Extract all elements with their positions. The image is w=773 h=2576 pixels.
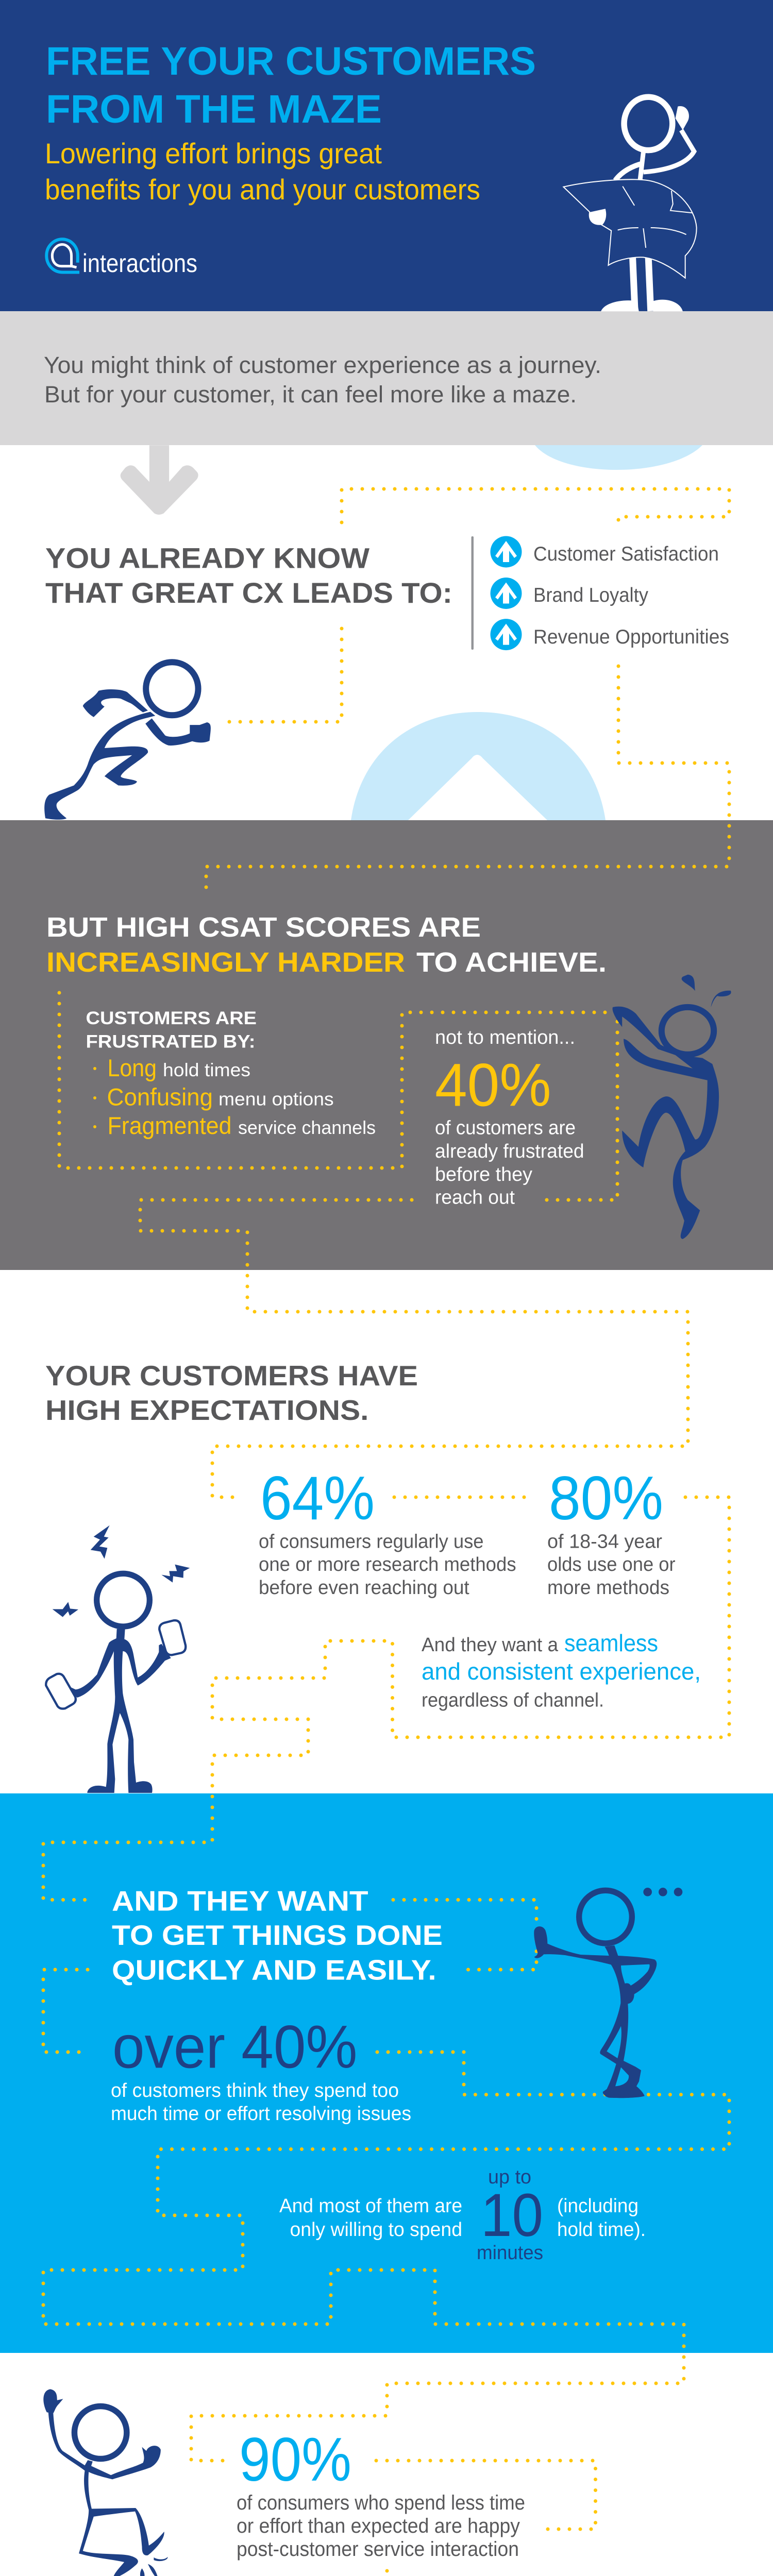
heading: get things done: AND THEY WANT [112, 1885, 368, 1917]
heading: get things done: TO GET THINGS DONE [112, 1919, 443, 1951]
stat: 64 percent: one or more research methods [259, 1554, 516, 1575]
title [46, 39, 536, 131]
heading: you already know: YOU ALREADY KNOW [45, 542, 369, 574]
text: seamless experience [422, 1630, 701, 1711]
text: willing to spend 10 minutes: minutes [477, 2242, 543, 2264]
text: seamless experience: and consistent experience, [422, 1658, 701, 1685]
frustration list: Long [107, 1054, 157, 1081]
text: seamless experience: And they want a [422, 1634, 559, 1656]
heading: high csat [46, 912, 607, 978]
text: willing to spend 10 minutes: up to [488, 2166, 531, 2188]
heading: high expectations: YOUR CUSTOMERS HAVE [45, 1360, 418, 1392]
heading: high csat: BUT HIGH CSAT SCORES ARE [46, 912, 481, 943]
arrow: grey down arrow [121, 445, 198, 515]
heading: high csat: TO ACHIEVE. [416, 947, 607, 978]
benefit labels: Brand Loyalty [533, 584, 648, 606]
benefits list [471, 536, 729, 650]
decoration: light blue circle [535, 445, 702, 470]
stat: 64 percent: before even reaching out [259, 1577, 469, 1599]
frustration list: Confusing [107, 1083, 213, 1111]
stat: 90 percent: 90% [239, 2425, 351, 2494]
title: FROM THE MAZE [46, 87, 382, 131]
panel: 40 percent stat: 40% [435, 1052, 551, 1120]
icon: up arrow customer satisfaction [491, 536, 522, 568]
heading: you already know: THAT GREAT CX LEADS TO: [45, 577, 452, 609]
panel: 40 percent stat: before they [435, 1164, 532, 1185]
subtitle: benefits for you and your customers [45, 173, 480, 206]
stat: 80 percent: 80% [549, 1464, 663, 1533]
character: leaning person [534, 1888, 682, 2098]
heading: get things done [112, 1885, 443, 1986]
title: FREE YOUR CUSTOMERS [46, 39, 536, 83]
stat: over 40 percent [111, 2013, 411, 2125]
frustration list: service channels [238, 1117, 376, 1138]
panel: 40 percent stat: not to mention... [435, 1027, 575, 1048]
stat: over 40 percent: much time or effort resolving issues [111, 2103, 411, 2125]
character: person with phones [46, 1526, 190, 1793]
text: willing to spend 10 minutes: hold time). [557, 2219, 646, 2241]
panel: 40 percent stat [435, 1027, 584, 1209]
character: running person [44, 662, 211, 820]
decoration: light blue up arch [351, 712, 606, 820]
text: willing to spend 10 minutes [279, 2166, 646, 2264]
frustration list: Fragmented [107, 1112, 232, 1139]
icon: up arrow brand loyalty [491, 578, 522, 609]
frustration list [93, 1054, 376, 1139]
text: willing to spend 10 minutes: And most of them are [279, 2195, 462, 2217]
logo: header [46, 239, 197, 278]
stat: 64 percent: of consumers regularly use [259, 1531, 483, 1553]
subtitle [45, 137, 480, 206]
frustrated heading: CUSTOMERS ARE [86, 1008, 257, 1028]
stat: 90 percent: or effort than expected are happy [237, 2515, 520, 2537]
text: willing to spend 10 minutes: only willing to spend [290, 2219, 462, 2241]
stat: 80 percent: more methods [547, 1577, 669, 1599]
panel: 40 percent stat: already frustrated [435, 1141, 584, 1162]
stat: 80 percent: of 18-34 year [547, 1531, 662, 1553]
frustrated heading: FRUSTRATED BY: [86, 1031, 256, 1052]
stat: 90 percent: post-customer service interaction [237, 2538, 519, 2561]
dotted maze path [43, 489, 729, 2576]
stat: over 40 percent: of customers think they spend too [111, 2080, 399, 2102]
stat: 64 percent [259, 1464, 516, 1599]
character: jumping person [43, 2389, 167, 2576]
stat: 90 percent: of consumers who spend less time [237, 2492, 525, 2514]
text: willing to spend 10 minutes: (including [557, 2195, 638, 2217]
heading: you already know [45, 542, 452, 609]
text: willing to spend 10 minutes: 10 [481, 2181, 543, 2249]
frustration list: hold times [163, 1059, 250, 1080]
benefit labels: Revenue Opportunities [533, 626, 729, 648]
heading: get things done: QUICKLY AND EASILY. [112, 1954, 436, 1986]
stat: 90 percent [237, 2425, 525, 2561]
intro text: You might think of customer experience as a journey. [44, 352, 601, 378]
subtitle: Lowering effort brings great [45, 137, 382, 170]
stat: 64 percent: 64% [260, 1464, 375, 1533]
stat: over 40 percent: over 40% [112, 2013, 358, 2081]
benefit labels: Customer Satisfaction [533, 543, 719, 565]
benefit labels [533, 543, 729, 648]
intro text [44, 352, 601, 408]
heading: high expectations [45, 1360, 418, 1426]
panel: 40 percent stat: of customers are [435, 1117, 576, 1139]
text: seamless experience: seamless [564, 1630, 658, 1656]
character: person reading a map [563, 97, 697, 311]
text: seamless experience: regardless of channel. [422, 1690, 604, 1711]
panel: customers are frustrated by [86, 1008, 376, 1139]
icon: up arrow revenue opportunities [491, 619, 522, 650]
frustrated heading [86, 1008, 257, 1052]
stat: 80 percent: olds use one or [547, 1554, 676, 1575]
intro text: But for your customer, it can feel more like a maze. [44, 381, 577, 408]
character: frustrated person [613, 975, 731, 1239]
heading: high csat: INCREASINGLY HARDER [46, 947, 405, 978]
stat: 80 percent [547, 1464, 676, 1599]
heading: high expectations: HIGH EXPECTATIONS. [45, 1394, 369, 1426]
panel: 40 percent stat: reach out [435, 1187, 515, 1209]
logo: header: interactions [82, 249, 197, 278]
frustration list: menu options [219, 1088, 334, 1110]
